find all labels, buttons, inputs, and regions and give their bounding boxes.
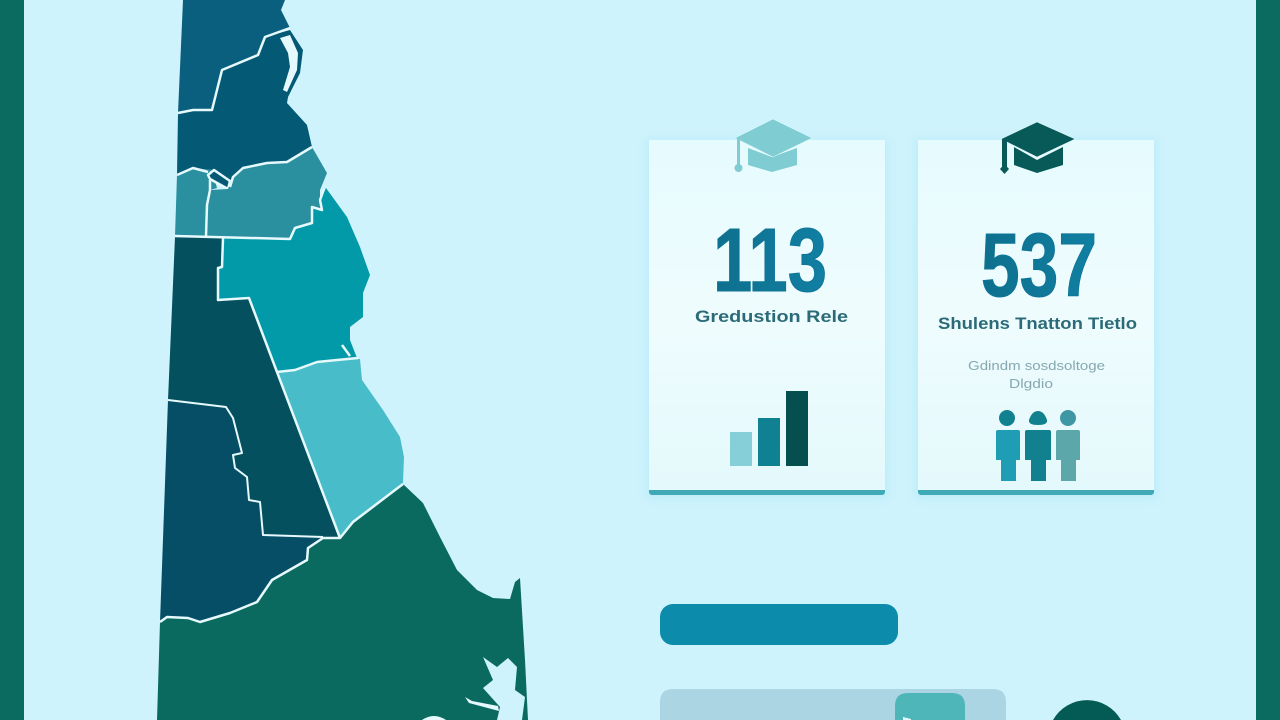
lake: [280, 35, 298, 92]
region: north county: [178, 0, 290, 113]
region: light teal county: [277, 359, 404, 538]
dark circle badge: [1053, 700, 1121, 720]
region: east teal county: [218, 188, 370, 372]
coastal island cut-out: [483, 657, 525, 720]
right side band: [1256, 0, 1280, 720]
coastal inlet arm: [465, 697, 499, 711]
left side band: [0, 0, 24, 720]
big number: 537: [981, 216, 1097, 316]
card bottom accent: [918, 470, 1154, 495]
card body: [649, 140, 885, 490]
panel: student ratio: [914, 122, 1158, 500]
chip highlight: [903, 717, 911, 720]
icon: light graduation cap: [734, 119, 812, 172]
map of counties: [157, 0, 528, 720]
region: south green county: [157, 484, 528, 720]
card body: [918, 140, 1154, 490]
chart: rising bars: [730, 391, 808, 466]
card bottom accent: [649, 470, 885, 495]
big number: 113: [713, 211, 827, 311]
region: west mid county: [175, 168, 217, 236]
region: central county: [206, 147, 327, 239]
region: southwest county: [160, 400, 323, 622]
panel: graduation rate: [645, 119, 889, 500]
county boundaries: [160, 28, 403, 622]
metric label: Gredustion Rele: [695, 307, 848, 326]
caption: Dlgdio: [1009, 377, 1053, 391]
region: small enclave: [208, 170, 230, 189]
pale progress bar with chip: [660, 689, 1006, 720]
region: west dark county: [168, 237, 340, 538]
caption: Gdindm sosdsoltoge: [968, 359, 1105, 373]
south shoal: [422, 716, 446, 720]
caption: [968, 359, 1105, 391]
icon: three students: [996, 410, 1080, 481]
solid progress bar: [660, 604, 898, 645]
icon: dark graduation cap: [1000, 122, 1075, 174]
metric label: Shulens Tnatton Tietlo: [938, 314, 1137, 333]
region: upper county: [177, 30, 312, 187]
chip: [895, 693, 965, 720]
